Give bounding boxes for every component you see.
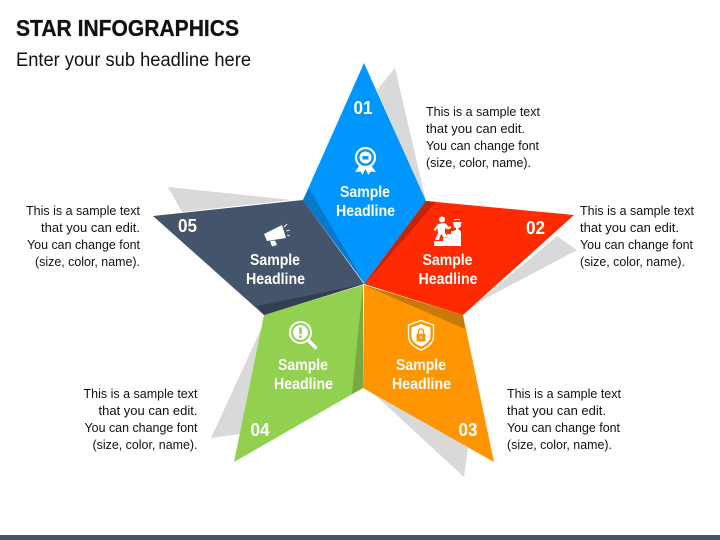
text block 01: (size, color, name). (426, 155, 531, 170)
text block 02: (size, color, name). (580, 254, 685, 269)
icon: magnifier with exclamation (290, 322, 316, 348)
headline 05: Headline (246, 271, 305, 288)
text block 03: (size, color, name). (507, 437, 612, 452)
icon: security shield (408, 320, 434, 350)
icon: award ribbon (355, 148, 376, 175)
headline 02: Sample (422, 252, 473, 269)
panel 04: green (234, 285, 363, 462)
text block 01: This is a sample text (426, 104, 540, 119)
text block 02: You can change font (580, 237, 693, 252)
text block 04: This is a sample text (84, 386, 198, 401)
bottom bar (0, 535, 720, 540)
subtitle: Enter your sub headline here (16, 50, 251, 71)
headline 01: Sample (340, 184, 390, 201)
text block 02: that you can edit. (580, 220, 679, 235)
headline 03: Sample (396, 357, 446, 374)
icon: megaphone (264, 224, 290, 246)
text block 03: This is a sample text (507, 386, 621, 401)
text block 01: that you can edit. (426, 121, 525, 136)
panel 05: navy (153, 200, 364, 315)
headline 02: Headline (418, 271, 478, 288)
headline 04: Headline (274, 376, 333, 393)
star shadows (168, 68, 577, 477)
text block 05: This is a sample text (26, 203, 140, 218)
number 04: 04 (250, 420, 270, 440)
panel 02: red (364, 201, 574, 315)
number 05: 05 (178, 216, 197, 236)
text block 01: You can change font (426, 138, 539, 153)
text block 05: that you can edit. (41, 220, 140, 235)
title: STAR INFOGRAPHICS (16, 15, 239, 41)
headline 05: Sample (250, 252, 300, 269)
headline 03: Headline (392, 376, 451, 393)
panel 01: blue (303, 63, 426, 284)
number 01: 01 (354, 98, 372, 118)
icon: climbing stairs to trophy (434, 216, 462, 246)
text block 03: that you can edit. (507, 403, 606, 418)
text block 05: (size, color, name). (35, 254, 140, 269)
headline 01: Headline (336, 203, 395, 220)
text block 03: You can change font (507, 420, 620, 435)
text block 05: You can change font (27, 237, 140, 252)
text block 02: This is a sample text (580, 203, 694, 218)
text block 04: that you can edit. (98, 403, 198, 418)
panel 03: orange (363, 285, 494, 462)
number 03: 03 (458, 420, 478, 440)
text block 04: You can change font (84, 420, 198, 435)
headline 04: Sample (278, 357, 328, 374)
text block 04: (size, color, name). (92, 437, 198, 452)
number 02: 02 (526, 218, 545, 238)
